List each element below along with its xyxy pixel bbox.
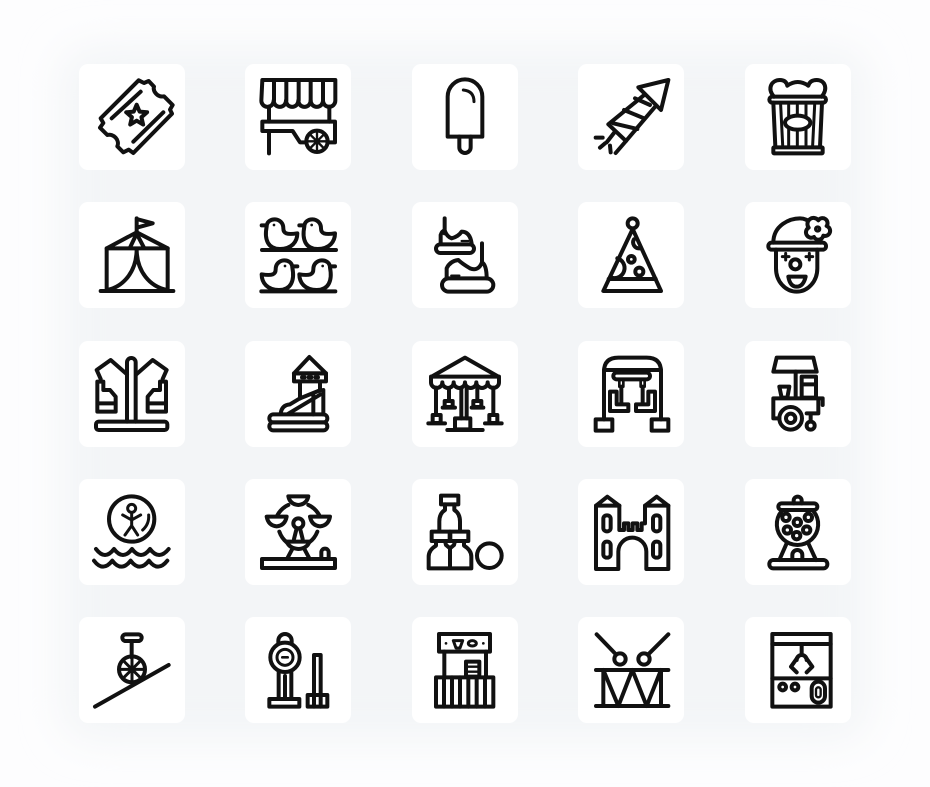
icon: clown bbox=[768, 218, 830, 292]
panel: popsicle bbox=[412, 64, 518, 170]
panel: party hat bbox=[578, 202, 684, 308]
icon: popsicle bbox=[448, 79, 482, 153]
icon: game booth bbox=[436, 634, 493, 707]
panel: duck shooting gallery bbox=[245, 202, 351, 308]
panel: high striker bbox=[245, 617, 351, 723]
icon: drum bbox=[596, 634, 668, 706]
panel: clown bbox=[745, 202, 851, 308]
icon: gumball machine bbox=[769, 497, 827, 568]
icon: claw machine bbox=[772, 634, 831, 707]
icon: bottle toss bbox=[429, 496, 502, 568]
panel: ferris wheel bbox=[245, 479, 351, 585]
panel: castle bbox=[578, 479, 684, 585]
icon: bumper cars bbox=[436, 218, 493, 292]
panel: food cart bbox=[245, 64, 351, 170]
icon: high striker bbox=[269, 634, 327, 707]
panel: firework rocket bbox=[578, 64, 684, 170]
panel: swing ride bbox=[79, 341, 185, 447]
panel: claw machine bbox=[745, 617, 851, 723]
icon: swing ride bbox=[96, 358, 167, 430]
panel: water ball bbox=[79, 479, 185, 585]
icon: ferris wheel bbox=[262, 496, 335, 568]
icon: party hat bbox=[603, 218, 661, 291]
icon: food cart bbox=[261, 80, 335, 153]
panel: unicycle bbox=[79, 617, 185, 723]
icon: circus tent bbox=[101, 218, 173, 291]
panel: slide tower bbox=[245, 341, 351, 447]
panel: circus tent bbox=[79, 202, 185, 308]
panel: ticket bbox=[79, 64, 185, 170]
icon: ducks bbox=[261, 219, 336, 291]
panel: bottle toss bbox=[412, 479, 518, 585]
panel: carousel bbox=[412, 341, 518, 447]
panel: popcorn bbox=[745, 64, 851, 170]
panel: gumball machine bbox=[745, 479, 851, 585]
panel: game booth bbox=[412, 617, 518, 723]
icon: firework rocket bbox=[596, 80, 668, 153]
icon: ticket bbox=[100, 80, 173, 153]
panel: bumper cars bbox=[412, 202, 518, 308]
panel: swing frame bbox=[578, 341, 684, 447]
icon: carousel bbox=[428, 358, 502, 430]
icon: water ball bbox=[94, 496, 169, 567]
panel: vendor cart bbox=[745, 341, 851, 447]
icon: vendor cart bbox=[773, 358, 823, 430]
icon: popcorn bbox=[769, 80, 826, 153]
icon: slide tower bbox=[269, 357, 327, 430]
panel: drum bbox=[578, 617, 684, 723]
icon: castle bbox=[596, 497, 668, 569]
icon: swing frame bbox=[596, 358, 668, 431]
icon: unicycle bbox=[95, 634, 169, 707]
